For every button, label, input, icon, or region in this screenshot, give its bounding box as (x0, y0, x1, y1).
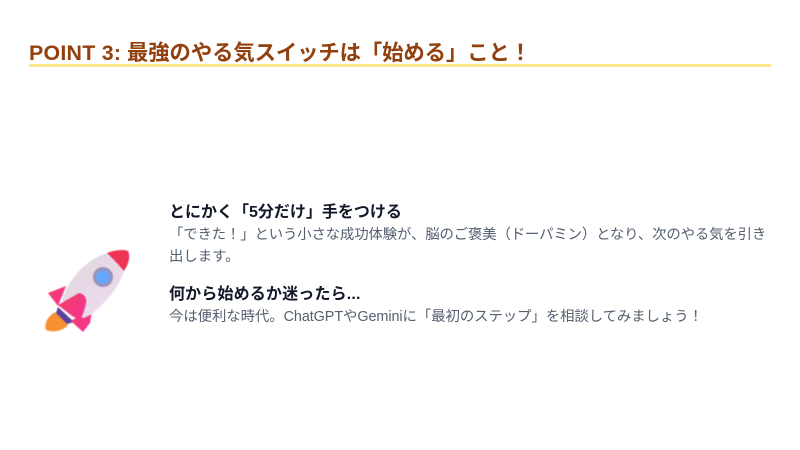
text block: second heading: 何から始めるか迷ったら... (169, 286, 361, 303)
flame (45, 312, 68, 331)
window (93, 267, 113, 287)
text block: first description (169, 226, 766, 265)
front fin (58, 293, 86, 320)
title underline (29, 64, 771, 67)
body (62, 253, 124, 318)
back fin (48, 286, 66, 306)
nozzle (56, 307, 74, 324)
nose (107, 250, 129, 271)
icon: rocket (44, 249, 130, 332)
lower fin (71, 311, 92, 332)
title: POINT 3: 最強のやる気スイッチは「始める」こと！ (29, 41, 531, 65)
text block: second description: 今は便利な時代。ChatGPTやGeminiに「最初のステップ」を相談してみましょう！ (169, 309, 703, 325)
text block: first description: 「できた！」という小さな成功体験が、脳のご褒美（ドーパミン）となり、次のやる気を引き (169, 227, 766, 243)
text block: first heading: とにかく「5分だけ」手をつける (169, 204, 402, 221)
text block: first description: 出します。 (169, 249, 240, 265)
